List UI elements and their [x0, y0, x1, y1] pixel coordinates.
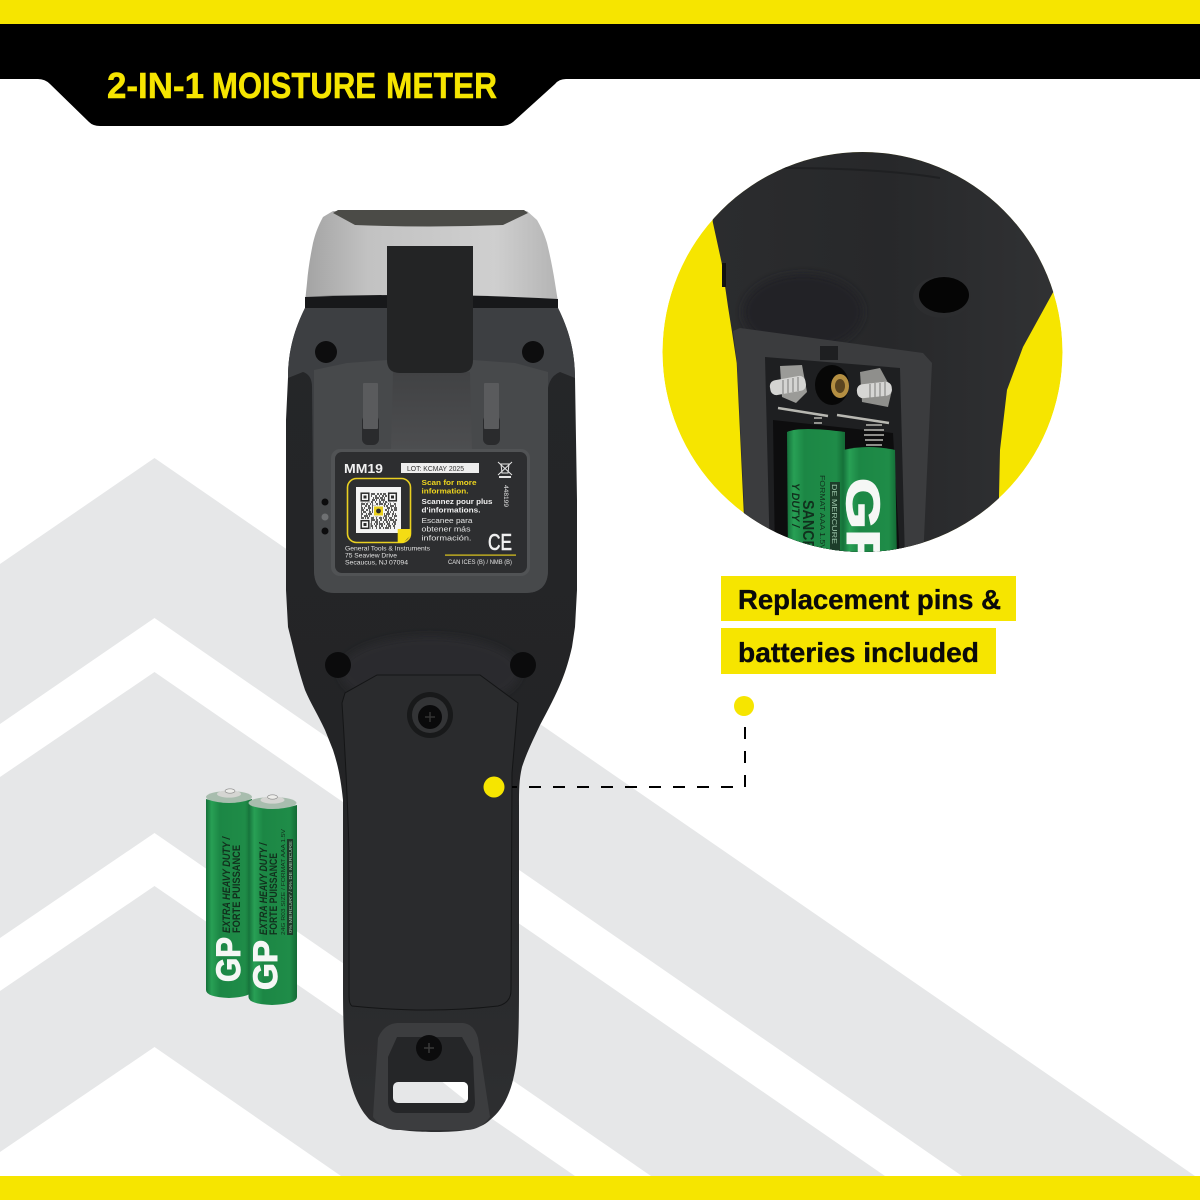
- weee icon: [498, 462, 512, 478]
- left tab: [362, 383, 379, 445]
- ce mark: CE: [488, 529, 512, 555]
- right pin: [856, 368, 893, 407]
- right inset battery: [843, 447, 897, 552]
- address: 75 Seaview Drive: [345, 552, 397, 560]
- top screws: [315, 341, 544, 363]
- left inset battery: DE MERCURE: [830, 484, 837, 544]
- moulded bump: [746, 278, 848, 340]
- left battery: [206, 789, 252, 998]
- header black banner: [0, 24, 1200, 126]
- right battery: FORTE PUISSANCE: [268, 853, 280, 935]
- left battery: EXTRA HEAVY DUTY /: [221, 835, 233, 933]
- bottom yellow band: [0, 1176, 1200, 1200]
- title: METER: [386, 65, 497, 106]
- callout: replacement pins and batteries: batteries included: [738, 637, 979, 668]
- batteries: [206, 789, 297, 1005]
- scan instructions: information.: [422, 486, 468, 496]
- battery cavity: [773, 420, 900, 560]
- background chevrons: [0, 458, 1195, 1176]
- callout: replacement pins and batteries: [721, 576, 1016, 674]
- qr fold corner: [398, 529, 411, 543]
- black seam: [305, 295, 558, 312]
- address: Secaucus, NJ 07094: [345, 560, 408, 566]
- left inset battery: FORMAT AAA 1.5V: [818, 475, 825, 550]
- scan instructions: Escanee para: [422, 516, 473, 525]
- top seam: [780, 168, 940, 178]
- right inset battery: GP: [837, 478, 889, 573]
- title: 2-IN-1: [107, 65, 204, 106]
- centre slot: [391, 372, 472, 450]
- callout dot: [734, 696, 754, 716]
- address: General Tools & Instruments: [345, 546, 430, 553]
- title: MOISTURE: [212, 65, 376, 106]
- scan instructions: obtener más: [422, 524, 471, 534]
- compartment well: [765, 357, 905, 560]
- moisture meter device: [286, 210, 577, 1132]
- lower screws: [325, 652, 536, 678]
- part number: 448199: [502, 485, 509, 507]
- scan instructions: Scan for more: [422, 478, 476, 487]
- right battery: 24G R03 SIZE / FORMAT AAA 1.5V: [281, 828, 287, 935]
- left inset battery: [787, 429, 845, 560]
- main body silhouette: [286, 308, 577, 1132]
- cover screw: [407, 692, 453, 738]
- scan instructions: [422, 478, 492, 542]
- right tab: [483, 383, 500, 445]
- device close-up body: [712, 150, 1062, 560]
- moulded dome: [340, 636, 520, 708]
- left pin: [769, 365, 807, 403]
- right battery: EXTRA HEAVY DUTY /: [258, 841, 270, 935]
- scan instructions: Scannez pour plus: [422, 497, 492, 506]
- springs: [814, 418, 884, 445]
- lot box: LOT: KCMAY 2025: [407, 464, 464, 473]
- housing lower lighter panel: [314, 360, 548, 593]
- brass insert: [815, 365, 849, 405]
- right battery: [247, 795, 297, 1005]
- dashed leader line: [512, 727, 745, 787]
- contact strips: [778, 408, 889, 423]
- callout: replacement pins and batteries: Replacement pins &: [738, 584, 1001, 615]
- frame notch: [820, 346, 838, 360]
- indicator holes: [322, 498, 328, 534]
- inset circle: battery compartment close-up: [662, 150, 1062, 573]
- qr code: [356, 487, 401, 533]
- label plate: [331, 449, 530, 576]
- anchor dot on device: [484, 776, 504, 798]
- side notch: [722, 263, 726, 287]
- left battery: GP: [210, 937, 248, 982]
- scan instructions: información.: [422, 534, 472, 542]
- compliance line: [445, 554, 516, 566]
- grey upper housing: [288, 308, 575, 593]
- screw hole: [919, 277, 969, 313]
- scan instructions: d'informations.: [422, 506, 480, 514]
- right battery: 0% MERCURY / 0% DE MERCURE: [288, 841, 293, 933]
- top yellow band: [0, 0, 1200, 24]
- yellow disc: [662, 152, 1062, 552]
- compliance line: CAN ICES (B) / NMB (B): [448, 560, 512, 566]
- left inset battery: SANCE: [799, 500, 816, 550]
- belt clip: [387, 246, 473, 373]
- silver cap: [305, 211, 558, 302]
- left inset battery: Y DUTY /: [789, 483, 801, 529]
- lanyard loop: [373, 1023, 490, 1130]
- address: [345, 546, 430, 566]
- model name: MM19: [344, 461, 383, 476]
- title: [107, 65, 497, 106]
- cover frame: [733, 328, 932, 560]
- qr frame: [348, 478, 410, 542]
- left battery: FORTE PUISSANCE: [231, 845, 243, 933]
- battery cover: [342, 675, 518, 1010]
- right battery: GP: [247, 940, 285, 990]
- top sensor window: [333, 210, 528, 226]
